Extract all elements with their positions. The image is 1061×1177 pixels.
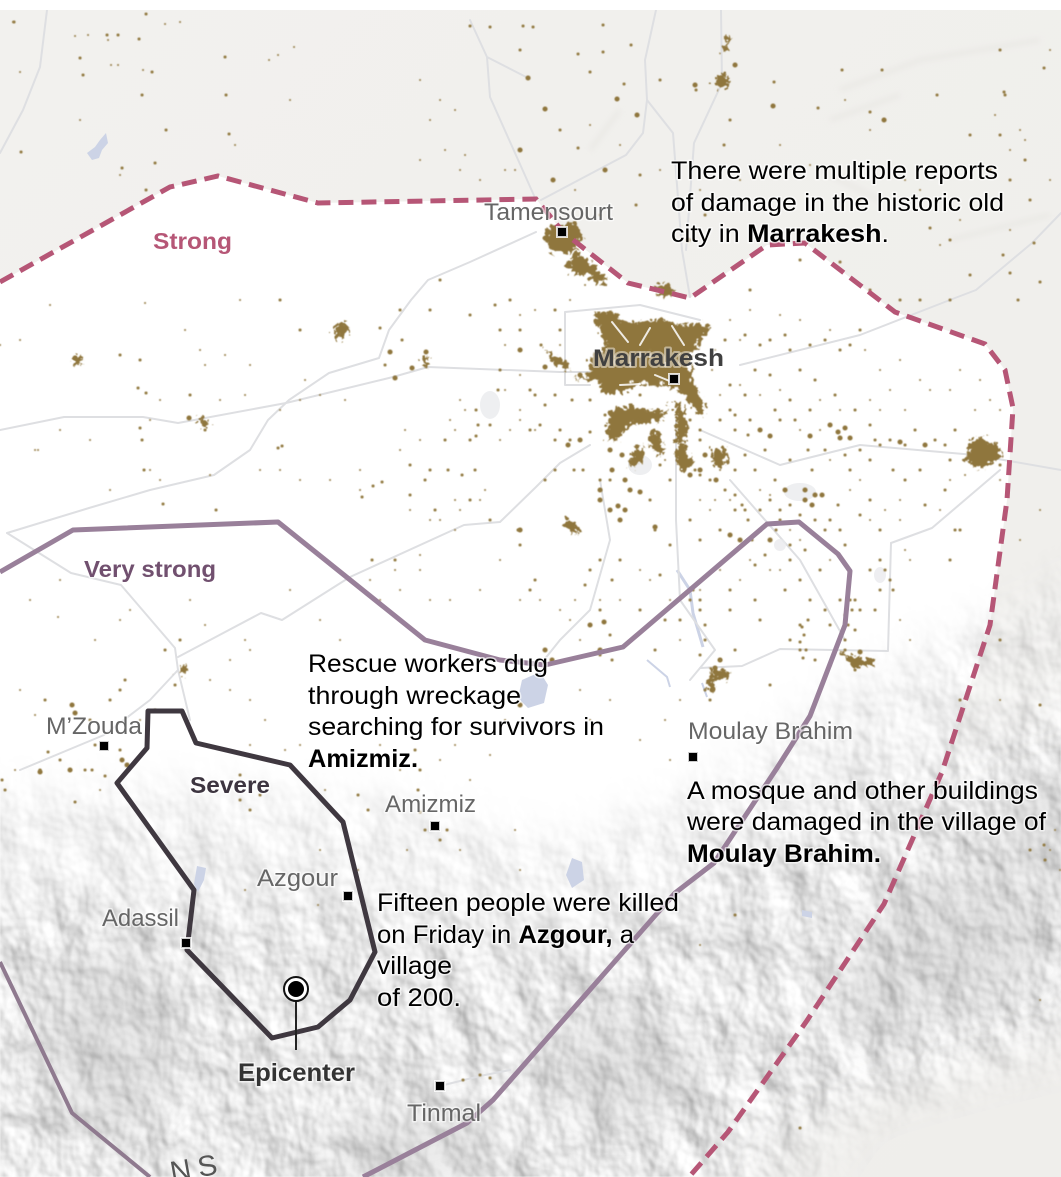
darker mountain masses xyxy=(40,770,1061,1177)
top margin xyxy=(0,0,1061,10)
city marker and label: Tamensourt: Tamensourt xyxy=(484,199,613,226)
city marker and label: Azgour: Azgour xyxy=(257,865,338,892)
city marker and label: Marrakesh xyxy=(593,345,724,384)
city marker and label: Tamensourt xyxy=(484,199,613,237)
zone label: Severe: Severe xyxy=(190,772,270,798)
city marker and label: Adassil xyxy=(102,905,191,948)
built-up area: Marrakesh and larger towns xyxy=(72,30,998,690)
annotation: Marrakesh damage: city in Marrakesh . xyxy=(671,220,889,248)
city marker and label: Adassil: Adassil xyxy=(102,905,179,932)
annotation: Amizmiz rescue xyxy=(308,650,604,773)
city marker and label: Moulay Brahim: Moulay Brahim xyxy=(688,718,853,745)
annotation: Amizmiz rescue: searching for survivors in xyxy=(308,713,604,741)
city marker and label: M'Zouda xyxy=(46,713,143,751)
city marker and label: Moulay Brahim xyxy=(688,718,853,762)
annotation: Marrakesh damage: There were multiple reports xyxy=(671,157,998,185)
very strong shaking zone boundary xyxy=(0,522,850,1177)
epicenter marker xyxy=(238,977,355,1087)
severe shaking zone boundary xyxy=(117,711,375,1038)
zone label: Very strong: Very strong xyxy=(84,556,216,582)
gaps inside the Marrakesh urban area xyxy=(597,322,684,410)
urban pale halos xyxy=(480,391,886,583)
faint desert relief xyxy=(590,40,1050,240)
annotation: Marrakesh damage: of damage in the historic old xyxy=(671,189,1004,217)
annotation: Azgour deaths: village xyxy=(377,952,452,980)
annotation: Amizmiz rescue: Amizmiz. xyxy=(308,745,418,773)
annotation: Moulay Brahim damage: A mosque and other buildings xyxy=(687,777,1038,805)
water bodies xyxy=(87,133,812,918)
epicenter marker: Epicenter xyxy=(238,1059,355,1087)
annotation: Amizmiz rescue: through wreckage xyxy=(308,682,521,710)
city marker and label: Tinmal xyxy=(407,1081,481,1127)
annotation: Marrakesh damage xyxy=(671,157,1004,248)
annotation: Azgour deaths: Fifteen people were killed xyxy=(377,889,679,917)
annotation: Moulay Brahim damage: were damaged in the village of xyxy=(686,808,1046,836)
city marker and label: Tinmal: Tinmal xyxy=(407,1100,481,1127)
mountain relief xyxy=(0,586,1061,1177)
annotation: Azgour deaths: on Friday in Azgour, a xyxy=(377,921,634,949)
annotation: Moulay Brahim damage: Moulay Brahim. xyxy=(687,840,881,868)
city marker and label: Marrakesh: Marrakesh xyxy=(593,345,724,372)
built-up area: scattered settlements, large xyxy=(40,65,925,772)
annotation: Azgour deaths: of 200. xyxy=(377,984,461,1012)
city marker and label: M'Zouda: M’Zouda xyxy=(46,713,143,740)
city marker and label: Amizmiz: Amizmiz xyxy=(385,791,476,818)
very strong shaking zone boundary, western arc xyxy=(0,962,150,1177)
city marker and label: Azgour xyxy=(257,865,353,901)
zone label: Strong: Strong xyxy=(153,228,232,254)
city marker and label: Amizmiz xyxy=(385,791,476,831)
annotation: Azgour deaths xyxy=(377,889,679,1012)
annotation: Moulay Brahim damage xyxy=(686,777,1046,868)
annotation: Amizmiz rescue: Rescue workers dug xyxy=(308,650,548,678)
